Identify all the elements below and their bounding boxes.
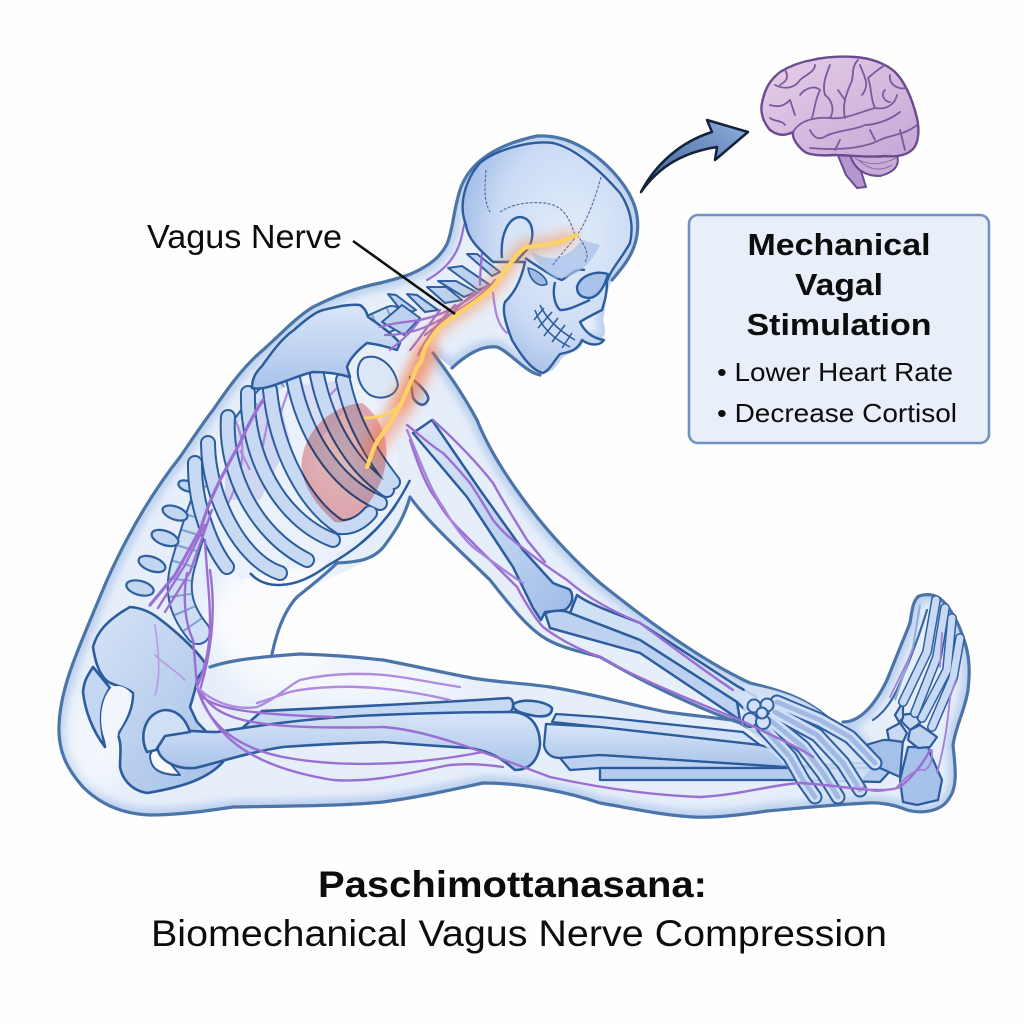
talus xyxy=(908,725,937,748)
skull xyxy=(463,142,632,373)
cheek and nasal lines xyxy=(525,258,590,310)
far femur xyxy=(240,698,513,730)
finger bones xyxy=(763,702,875,797)
shoulder and arm bones xyxy=(252,305,757,720)
teeth xyxy=(534,305,575,348)
pelvis xyxy=(83,607,226,793)
back rib cage background xyxy=(200,372,400,580)
acromion detail xyxy=(410,377,428,405)
panel bullets: • Lower Heart Rate xyxy=(717,357,953,387)
cranium and face xyxy=(463,142,632,373)
patella xyxy=(513,701,552,716)
brain folds xyxy=(770,60,917,150)
near femur xyxy=(158,712,540,770)
neck vertebrae xyxy=(382,254,500,335)
sacrum xyxy=(83,667,110,747)
mid foot xyxy=(866,740,903,777)
brainstem xyxy=(837,153,866,188)
cerebrum xyxy=(761,57,918,157)
ear xyxy=(502,217,532,262)
nerves: legs and spine xyxy=(150,400,956,797)
body outline xyxy=(59,136,969,817)
fibula xyxy=(560,755,893,770)
suture lines xyxy=(485,170,601,265)
foot xyxy=(866,600,960,805)
body silhouette xyxy=(59,136,969,817)
small socket xyxy=(528,268,547,285)
cerebellum lines xyxy=(855,158,896,169)
temporal shadow xyxy=(530,240,600,278)
forearm: upper bone xyxy=(570,595,757,710)
costal margin xyxy=(250,480,410,585)
nerves: arm xyxy=(407,420,813,757)
nerves: neck plexus and head xyxy=(380,158,567,355)
hand xyxy=(742,684,877,800)
scapula xyxy=(252,305,400,389)
white gaps under arm and above thighs xyxy=(272,497,740,723)
panel bullets xyxy=(717,357,957,428)
spine xyxy=(125,318,392,632)
eye socket xyxy=(577,273,608,298)
spinous processes xyxy=(125,478,197,598)
hand soft tissue xyxy=(742,684,877,800)
panel bullets: • Decrease Cortisol xyxy=(717,398,957,428)
panel heading xyxy=(746,227,932,342)
lower leg bones xyxy=(544,714,893,782)
white pelvic notch xyxy=(101,686,132,746)
figure: seated forward fold anatomy xyxy=(59,136,969,817)
obturator foramen xyxy=(150,745,180,775)
vagus nerve highlight xyxy=(365,235,577,467)
big toe xyxy=(895,605,920,700)
panel heading: Mechanical xyxy=(748,227,930,262)
title xyxy=(151,864,887,954)
arrow to brain xyxy=(641,120,748,192)
panel heading: Vagal xyxy=(795,267,883,302)
yellow nerve xyxy=(367,235,577,467)
title: Biomechanical Vagus Nerve Compression xyxy=(151,913,887,954)
panel: Mechanical Vagal Stimulation xyxy=(689,215,989,443)
carpal bones xyxy=(743,698,774,729)
title: Paschimottanasana: xyxy=(318,864,707,905)
panel heading: Stimulation xyxy=(746,307,932,342)
heel bone xyxy=(900,747,942,805)
label: Vagus Nerve: Vagus Nerve xyxy=(147,218,342,255)
forearm: lower bone xyxy=(545,611,740,720)
cerebellum xyxy=(850,155,898,176)
metatarsals and toes xyxy=(903,600,960,727)
orange glow xyxy=(400,237,570,403)
heart xyxy=(301,403,386,522)
femoral head xyxy=(143,710,190,752)
femurs xyxy=(143,698,552,770)
far shin xyxy=(552,714,760,745)
white gap between hand and foot xyxy=(760,600,910,722)
tibia xyxy=(544,724,800,767)
near shin band xyxy=(600,768,893,782)
leader line: Vagus Nerve xyxy=(353,241,455,314)
humerus xyxy=(413,420,572,620)
humeral head xyxy=(358,357,398,398)
tarsal bones xyxy=(887,723,907,742)
rib cage xyxy=(195,372,410,585)
white gap above the arm near the head xyxy=(433,340,760,660)
icon: brain xyxy=(761,57,918,188)
